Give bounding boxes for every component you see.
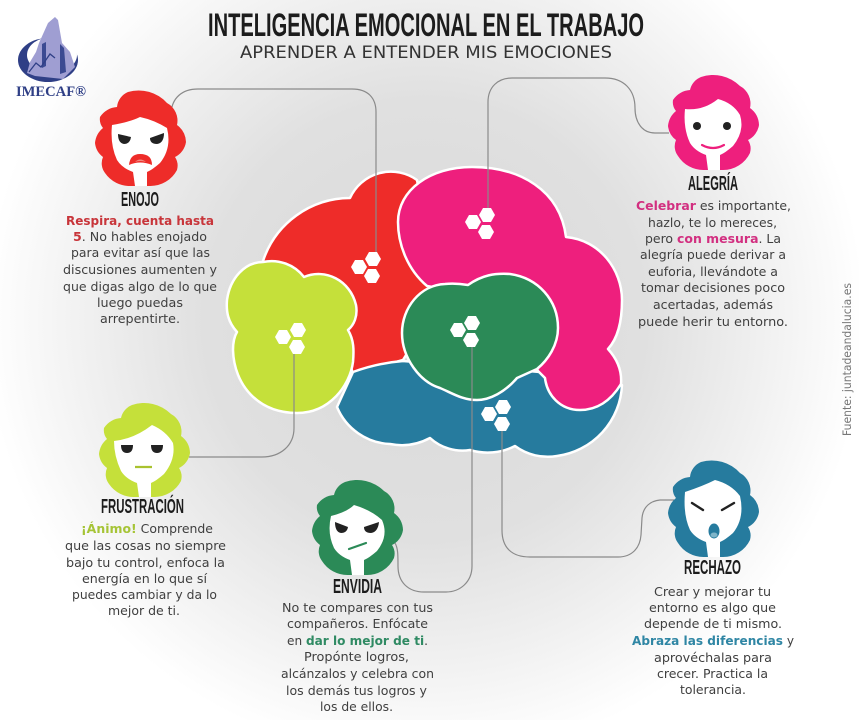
text block: alegría [636,199,791,330]
face: alegría [668,75,759,170]
text block: rechazo: tolerancia. [680,683,746,698]
text block: alegría: Celebrar es importante, [636,199,791,214]
text block: alegría: hazlo, te lo mereces, [648,216,777,231]
subtitle: APRENDER A ENTENDER MIS EMOCIONES [240,43,612,63]
text block: enojo: arrepentirte. [100,312,180,327]
text block: envidia: compañeros. Enfócate [287,617,428,632]
connector: rechazo [502,425,674,557]
face: frustración [99,403,190,497]
brain lobe: green [402,274,558,400]
text block: alegría: alegría puede derivar a [640,248,786,263]
label: envidia: ENVIDIA [333,576,382,598]
text block: enojo: Respira, cuenta hasta [66,214,214,229]
text block: frustración: mejor de ti. [108,604,180,619]
source credit: Fuente: juntadeandalucia.es [840,283,854,436]
brain illustration [227,167,622,457]
hexagon cluster: blue lobe [481,400,511,431]
text block: frustración: ¡Ánimo! Comprende [81,521,213,537]
text block: envidia: alcánzalos y celebra con [281,667,434,682]
connector: frustración [189,350,294,457]
face: envidia [312,480,403,575]
text block: frustración: que las cosas no siempre [65,539,226,554]
label: enojo: ENOJO [121,189,159,211]
text block: frustración: puedes cambiar y da lo [72,588,217,603]
hexagon cluster: pink lobe [465,208,495,239]
text block: frustración: bajo tu control, enfoca la [66,556,225,571]
text block: enojo [63,214,217,327]
text block: frustración [65,521,226,619]
text block: rechazo: Crear y mejorar tu [654,585,771,600]
text block: alegría: euforia, llevándote a [648,265,778,280]
brain lobe: red [263,172,440,374]
text block: rechazo: entorno es algo que [649,601,776,616]
text block: rechazo: aprovéchalas para [654,651,772,666]
hexagon cluster: red lobe [351,252,381,283]
logo: IMECAF [16,17,86,100]
text block: alegría: tomar decisiones poco [641,281,785,296]
text block: envidia: No te compares con tus [282,601,433,616]
text block: rechazo [632,585,794,698]
text block: enojo: para evitar así que las [71,246,210,261]
text block: rechazo: depende de ti mismo. [644,617,782,632]
hexagon cluster: lime lobe [275,323,306,354]
label: alegría: ALEGRÍA [688,172,738,195]
label: rechazo: RECHAZO [684,557,741,579]
text block: rechazo: Abraza las diferencias y [632,634,794,649]
text block: alegría: pero con mesura. La [645,232,781,247]
text block: enojo: discusiones aumenten y [63,263,217,278]
connector: envidia [395,342,472,592]
text block: enojo: que digas algo de lo que [63,280,217,295]
logo: IMECAF: IMECAF® [16,84,86,100]
label: frustración: FRUSTRACIÓN [101,494,184,518]
brain lobe: pink [398,167,622,410]
text block: rechazo: crecer. Practica la [657,667,768,682]
text block: enojo: luego puedas [97,296,183,311]
brain lobe: lime [227,261,357,413]
hexagon cluster: green lobe [450,316,480,347]
face: rechazo [668,460,759,557]
text block: frustración: energía en lo que sí [82,572,207,587]
text block: alegría: acertadas, además [653,298,773,313]
connector: enojo [171,89,376,255]
text block: enojo: 5. No hables enojado [73,230,207,245]
connector: alegría [488,78,669,212]
face: enojo [95,90,186,186]
text block: alegría: puede herir tu entorno. [638,315,788,330]
text block: envidia: los de ellos. [320,700,393,715]
brain lobe: blue [337,361,622,457]
text block: envidia: Propónte logros, [304,650,409,665]
text block: envidia: en dar lo mejor de ti. [287,634,428,649]
text block: envidia: los demás tus logros y [286,684,427,699]
text block: envidia [281,601,434,715]
